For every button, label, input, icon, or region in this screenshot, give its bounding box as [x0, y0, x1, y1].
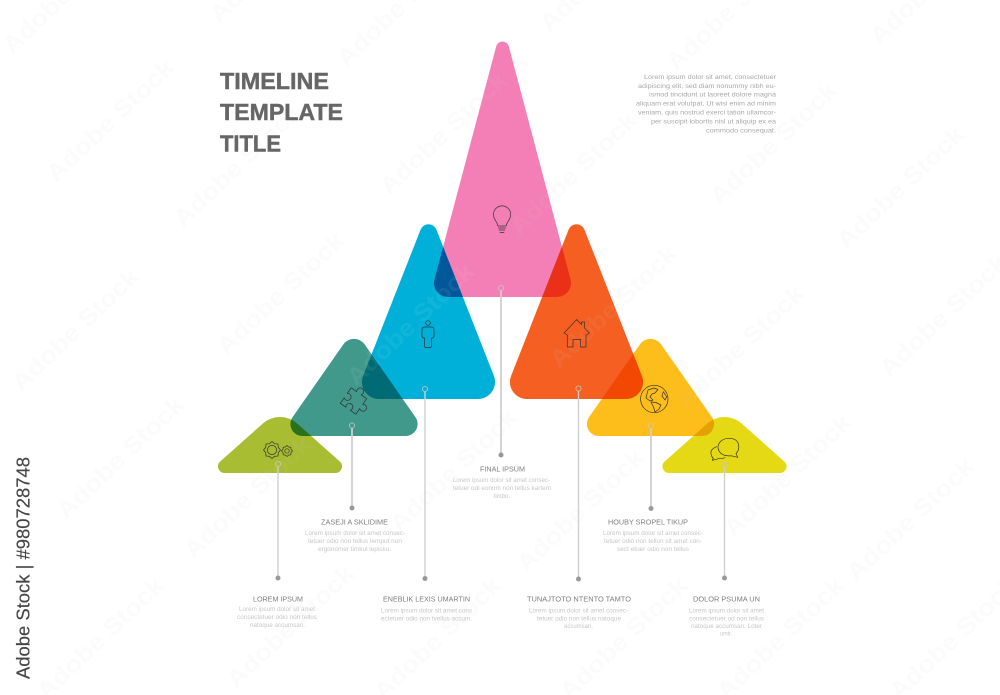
- text block: Tunajtoto Ntento Tamto: TUNAJTOTO NTENTO TAMTO: [527, 595, 631, 604]
- text block: Zaseji a Sklidime: [305, 518, 405, 553]
- triangle: green: [218, 417, 342, 473]
- icon: house: [564, 320, 590, 347]
- text block: Lorem Ipsum: consectetuer odio non tellus: [237, 615, 317, 621]
- text block: Final Ipsum: Lorem ipsum dolor sit amet consec-: [453, 478, 550, 484]
- title: TITLE: [220, 130, 281, 156]
- text block: Eneblik Lexis Umartin: Lorem ipsum dolor sit amet cons: [381, 608, 472, 614]
- watermark overlay on triangles: Adobe Stock: [719, 409, 857, 542]
- text block: Final Ipsum: [453, 465, 551, 500]
- text block: Zaseji a Sklidime: Lorem ipsum dolor sit amet consec-: [305, 531, 405, 537]
- connector: blue: [422, 386, 428, 581]
- triangle: orange: [510, 224, 643, 399]
- text block: Tunajtoto Ntento Tamto: accumsan.: [564, 624, 593, 630]
- intro paragraph: aliquam erat volutpat. Ut wisi enim ad minim: [636, 101, 776, 108]
- watermark overlay on triangles: Adobe Stock: [545, 240, 683, 373]
- icon: light bulb: [494, 206, 511, 232]
- text block: Tunajtoto Ntento Tamto: [527, 595, 631, 630]
- icon: globe: [641, 385, 668, 413]
- text block: Lorem Ipsum: LOREM IPSUM: [253, 595, 303, 604]
- stock credit: Adobe Stock | #980728748: [12, 457, 34, 679]
- text block: Houby Sropel Tikup: sect etuer odio non tellus: [617, 547, 689, 553]
- intro paragraph: commodo consequat.: [706, 127, 776, 134]
- watermark pattern: Adobe Stock: [52, 391, 190, 524]
- text block: Houby Sropel Tikup: Lorem ipsum dolor sit amet consec-: [603, 531, 703, 537]
- connector: orange: [576, 386, 581, 582]
- text block: Houby Sropel Tikup: HOUBY SROPEL TIKUP: [608, 518, 688, 527]
- watermark overlay on triangles: Adobe Stock: [375, 67, 513, 200]
- title: [220, 68, 343, 156]
- triangle: pink: [434, 42, 571, 297]
- watermark pattern: Adobe Stock: [169, 99, 307, 232]
- watermark pattern: Adobe Stock: [672, 280, 810, 413]
- intro paragraph: ismod tincidunt ut laoreet dolore magna: [649, 92, 776, 99]
- watermark pattern: Adobe Stock: [505, 107, 643, 240]
- intro paragraph: per suscipit lobortis nisl ut aliquip ex ea: [651, 118, 776, 125]
- watermark pattern: Adobe Stock: [375, 67, 513, 200]
- text block: Dolor Psuma Un: umir.: [720, 632, 732, 638]
- text block: Houby Sropel Tikup: [603, 518, 703, 553]
- text block: Dolor Psuma Un: consectetuer od non tellus: [689, 616, 764, 622]
- watermark pattern: Adobe Stock: [545, 240, 683, 373]
- watermark pattern: Adobe Stock: [705, 77, 843, 210]
- text block: Lorem Ipsum: Lorem ipsum dolor sit amet: [239, 607, 315, 613]
- text block: Eneblik Lexis Umartin: ectetuer odio non tvellus accum.: [381, 616, 472, 622]
- triangle: yellow: [663, 417, 786, 473]
- text block: Lorem Ipsum: natoque accumsan.: [250, 623, 305, 629]
- title: TIMELINE: [220, 68, 329, 94]
- text block: Zaseji a Sklidime: ZASEJI A SKLIDIME: [321, 518, 388, 527]
- watermark overlay on triangles: Adobe Stock: [179, 431, 317, 564]
- watermark pattern: Adobe Stock: [512, 444, 650, 577]
- triangle: blue: [362, 224, 495, 399]
- icon: puzzle piece: [340, 383, 375, 417]
- triangle: amber: [587, 339, 714, 436]
- watermark pattern: Adobe Stock: [842, 453, 980, 586]
- text block: Houby Sropel Tikup: tetuer odio non tellun sit amet con-: [604, 539, 702, 545]
- icon: speech bubbles: [711, 438, 739, 460]
- watermark pattern: Adobe Stock: [719, 409, 857, 542]
- triangle: teal: [290, 339, 418, 436]
- text block: Lorem Ipsum: [237, 595, 317, 629]
- watermark pattern: Adobe Stock: [222, 560, 360, 693]
- watermark pattern: Adobe Stock: [832, 121, 970, 254]
- text block: Final Ipsum: FINAL IPSUM: [480, 465, 525, 474]
- intro paragraph: [636, 74, 777, 134]
- icon: person: [422, 321, 434, 348]
- watermark overlay on triangles: Adobe Stock: [505, 107, 643, 240]
- text block: Final Ipsum: tetuer odi eonum non tellus kartem: [453, 486, 551, 492]
- intro paragraph: adipiscing elit, sed diam nonummy nibh eu-: [638, 83, 776, 90]
- title: TEMPLATE: [220, 99, 343, 125]
- text block: Zaseji a Sklidime: ergonomer timkul lepisku.: [318, 547, 391, 553]
- watermark pattern: Adobe Stock: [7, 263, 145, 396]
- watermark overlay on triangles: [179, 67, 857, 564]
- connector: green: [275, 461, 281, 580]
- connector: teal: [349, 423, 355, 510]
- watermark pattern: Adobe Stock: [212, 227, 350, 360]
- text block: Eneblik Lexis Umartin: ENEBLIK LEXIS UMARTIN: [383, 595, 470, 604]
- text block: Final Ipsum: limbo.: [494, 494, 510, 500]
- watermark pattern: Adobe Stock: [179, 431, 317, 564]
- connector: yellow: [722, 462, 727, 580]
- text block: Zaseji a Sklidime: tetuer odio non tellus lemput non: [308, 539, 402, 545]
- text block: Eneblik Lexis Umartin: [381, 595, 472, 622]
- text block: Tunajtoto Ntento Tamto: Lorem ipsum dolor sit amet consec-: [529, 608, 628, 614]
- intro paragraph: Lorem ipsum dolor sit amet, consectetuer: [644, 74, 777, 81]
- connector: amber: [648, 423, 654, 511]
- watermark pattern: Adobe Stock: [875, 249, 1000, 382]
- watermark overlay on triangles: Adobe Stock: [342, 258, 480, 391]
- watermark pattern: Adobe Stock: [385, 404, 523, 537]
- text block: Tunajtoto Ntento Tamto: tetuer odio non tellus natoque: [537, 616, 622, 622]
- connector: pink: [498, 285, 504, 458]
- text block: Dolor Psuma Un: natoque accumsan. Loter: [691, 624, 762, 630]
- intro paragraph: veniam, quis nostrud exerci tation ullamcor-: [638, 110, 776, 116]
- icon: gears: [264, 442, 292, 458]
- text block: Dolor Psuma Un: DOLOR PSUMA UN: [693, 595, 760, 604]
- text block: Dolor Psuma Un: [689, 595, 764, 638]
- watermark overlay on triangles: Adobe Stock: [212, 227, 350, 360]
- text block: Dolor Psuma Un: Lorem ipsum dolor sit amet: [689, 608, 764, 614]
- watermark overlay on triangles: Adobe Stock: [672, 280, 810, 413]
- watermark pattern: Adobe Stock: [42, 54, 180, 187]
